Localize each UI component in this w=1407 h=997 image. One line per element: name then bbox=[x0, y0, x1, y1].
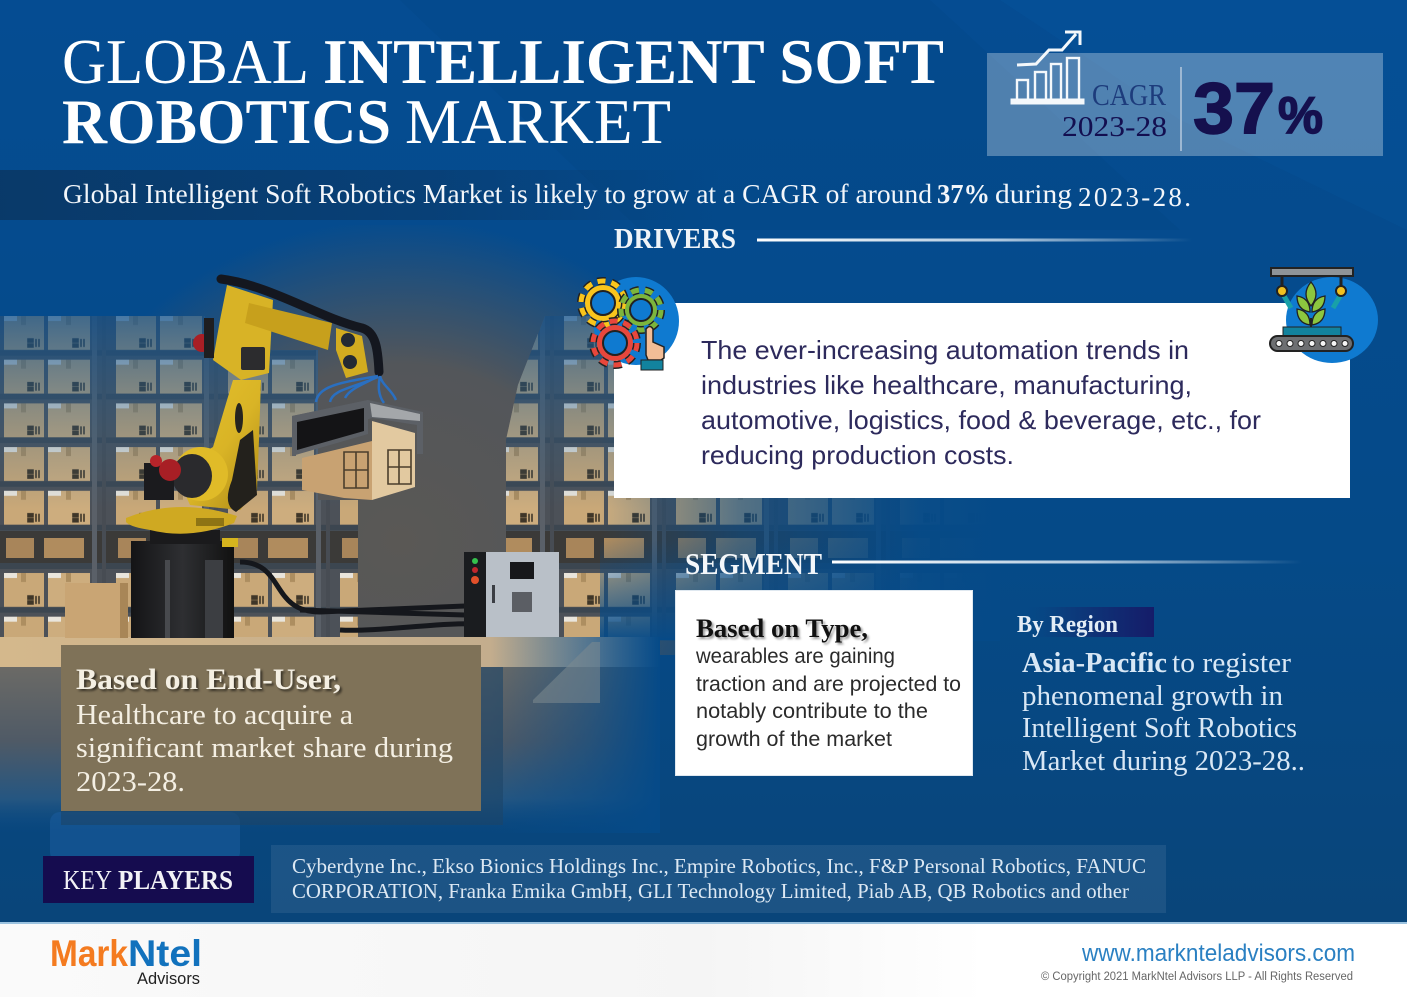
logo: Mark bbox=[50, 933, 128, 974]
logo: Ntel bbox=[128, 933, 202, 974]
footer bbox=[0, 922, 1407, 997]
CAGR label: CAGR bbox=[1092, 77, 1166, 112]
heading: segment bbox=[685, 546, 1302, 581]
CAGR value: 37 bbox=[1193, 69, 1275, 149]
title: MARKET bbox=[405, 87, 671, 157]
end-user heading: Based on End-User, bbox=[76, 663, 341, 696]
type text: notably contribute to the bbox=[696, 699, 928, 723]
robot arm bbox=[126, 279, 480, 638]
carried box bbox=[302, 421, 415, 500]
key players label: KEY bbox=[63, 865, 112, 895]
warehouse scene bbox=[0, 235, 914, 856]
robot base bbox=[131, 530, 238, 638]
copyright: © Copyright 2021 MarkNtel Advisors LLP - All Rights Reserved bbox=[1041, 971, 1353, 983]
region text: Intelligent Soft Robotics bbox=[1022, 713, 1297, 744]
blue hoses bbox=[316, 376, 396, 403]
region tag bbox=[1017, 607, 1154, 638]
key players label: PLAYERS bbox=[118, 865, 233, 895]
logo: Advisors bbox=[137, 969, 200, 988]
driver text: The ever-increasing automation trends in bbox=[701, 335, 1189, 365]
type text: traction and are projected to bbox=[696, 672, 961, 696]
key players list bbox=[271, 845, 1166, 913]
driver text: reducing production costs. bbox=[701, 440, 1014, 470]
logo bbox=[50, 933, 202, 988]
type text: wearables are gaining bbox=[695, 644, 895, 668]
CAGR panel bbox=[987, 32, 1383, 156]
driver text bbox=[701, 335, 1261, 470]
heading: drivers: DRIVERS bbox=[614, 223, 736, 255]
upper arm and wrist bbox=[193, 279, 379, 380]
key players list: Cyberdyne Inc., Ekso Bionics Holdings Inc., Empire Robotics, Inc., F&P Personal Robotics, FANUC bbox=[292, 854, 1146, 878]
title: ROBOTICS bbox=[62, 87, 391, 157]
end-user text: significant market share during bbox=[76, 733, 453, 764]
CAGR period: 2023-28 bbox=[1062, 111, 1167, 143]
title: GLOBAL bbox=[62, 27, 309, 97]
subtitle bbox=[63, 179, 1191, 212]
subtitle: 37% bbox=[937, 179, 990, 209]
lower arm bbox=[126, 380, 261, 534]
region text bbox=[1022, 648, 1305, 777]
CAGR value bbox=[1193, 69, 1323, 149]
type text bbox=[695, 644, 961, 751]
subtitle: 2023-28. bbox=[1078, 182, 1191, 212]
title bbox=[62, 27, 944, 157]
end-user text bbox=[76, 700, 453, 798]
heading: drivers bbox=[614, 223, 1192, 255]
key players list: CORPORATION, Franka Emika GmbH, GLI Technology Limited, Piab AB, QB Robotics and other bbox=[292, 879, 1129, 903]
icon: growth chart bbox=[1011, 32, 1084, 104]
region text: Market during 2023-28.. bbox=[1022, 746, 1305, 777]
panel: drivers bbox=[614, 303, 1350, 498]
driver text: automotive, logistics, food & beverage, etc., for bbox=[701, 405, 1261, 435]
cables bbox=[240, 562, 480, 630]
panel: type segment bbox=[676, 590, 972, 776]
heading: segment: SEGMENT bbox=[685, 546, 822, 581]
key players label bbox=[43, 856, 254, 903]
gripper bbox=[292, 400, 423, 456]
icon: conveyor with plant bbox=[1270, 268, 1378, 363]
panel: end-user bbox=[61, 645, 503, 825]
region text: phenomenal growth in bbox=[1022, 681, 1283, 712]
driver text: industries like healthcare, manufacturing, bbox=[701, 370, 1192, 400]
end-user text: Healthcare to acquire a bbox=[76, 700, 354, 731]
control cabinet bbox=[464, 552, 559, 637]
region text: Asia-Pacific bbox=[1022, 648, 1167, 679]
title band bbox=[0, 170, 720, 220]
subtitle: Global Intelligent Soft Robotics Market is likely to grow at a CAGR of around bbox=[63, 179, 933, 209]
icon: gears and hand bbox=[581, 277, 679, 370]
type text: growth of the market bbox=[696, 727, 892, 751]
region tag: By Region bbox=[1017, 612, 1118, 638]
type heading: Based on Type, bbox=[696, 614, 868, 643]
subtitle: during bbox=[995, 179, 1072, 209]
title: INTELLIGENT SOFT bbox=[323, 27, 944, 97]
CAGR value: % bbox=[1278, 87, 1323, 145]
end-user text: 2023-28. bbox=[76, 767, 185, 798]
region text: to register bbox=[1172, 648, 1292, 679]
website: www.marknteladvisors.com bbox=[1081, 940, 1355, 967]
